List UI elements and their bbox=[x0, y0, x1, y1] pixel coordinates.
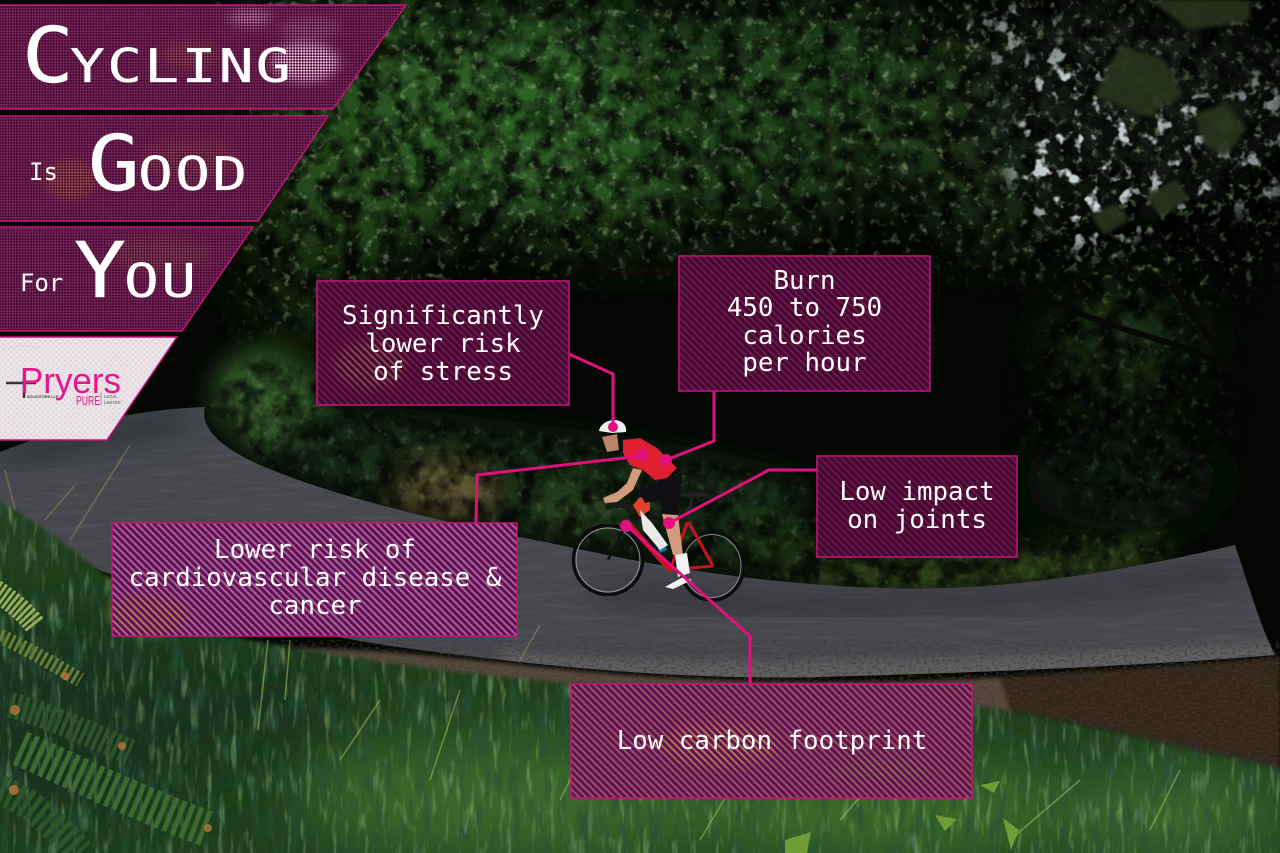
head bbox=[602, 434, 619, 452]
callout: cardiovascular: Lower risk of bbox=[214, 535, 416, 565]
line: joints bbox=[671, 470, 817, 522]
line: stress bbox=[569, 354, 613, 428]
callout: stress: Significantly bbox=[342, 301, 544, 331]
callout: stress bbox=[317, 281, 569, 405]
callout: stress: of stress bbox=[373, 357, 513, 387]
callout: cardiovascular: cardiovascular disease & bbox=[129, 563, 502, 593]
callout: joints: on joints bbox=[847, 505, 987, 535]
cyclist illustration bbox=[574, 420, 744, 600]
hedge bank bbox=[215, 350, 1165, 592]
logo panel: Pryers: LIMITED bbox=[104, 400, 121, 405]
front wheel bbox=[574, 526, 642, 594]
title banner: Cycling: YCLING bbox=[70, 40, 293, 93]
ferns bbox=[0, 590, 210, 853]
jersey bbox=[623, 438, 677, 480]
connector lines bbox=[476, 354, 817, 684]
title banner: For You: OU bbox=[124, 255, 198, 308]
near thigh cuff and far leg bbox=[633, 497, 692, 589]
logo small text: SOLICITORS LLP bbox=[27, 395, 59, 399]
title banner: Is Good: OOD bbox=[138, 148, 249, 201]
callout: joints: Low impact bbox=[839, 477, 995, 507]
logo panel: Pryers: PURE bbox=[76, 393, 100, 408]
line: cardiovascular bbox=[476, 456, 641, 523]
title banner: Is Good: G bbox=[88, 119, 140, 209]
line: carbon bbox=[627, 526, 750, 684]
title banner: For You: For bbox=[20, 269, 63, 297]
logo panel: Pryers: LEGAL bbox=[104, 394, 118, 399]
callout: carbon: Low carbon footprint bbox=[617, 726, 927, 756]
callout: cardiovascular bbox=[110, 523, 517, 636]
callout: joints bbox=[817, 456, 1017, 557]
rear wheel bbox=[680, 532, 744, 600]
grass bbox=[0, 480, 1280, 853]
helmet bbox=[599, 420, 626, 433]
title banner: For You bbox=[0, 226, 253, 331]
title banner: Cycling: C bbox=[22, 11, 74, 101]
callout: calories: calories bbox=[742, 321, 867, 351]
logo panel: Pryers bbox=[0, 337, 177, 440]
logo wordmark: Pryers bbox=[20, 360, 121, 401]
shorts bbox=[638, 473, 682, 515]
callout: calories: 450 to 750 bbox=[727, 293, 882, 323]
verge and dirt bbox=[290, 648, 1280, 772]
callout: carbon bbox=[571, 684, 972, 798]
callout: stress: lower risk bbox=[365, 329, 521, 359]
logo cross bbox=[6, 372, 36, 398]
callout: calories: per hour bbox=[742, 348, 867, 378]
line: calories bbox=[671, 391, 714, 458]
callout: cardiovascular: cancer bbox=[268, 591, 362, 621]
title banner: Is Good: Is bbox=[29, 158, 58, 186]
callout: calories: Burn bbox=[773, 266, 836, 296]
title banner: For You: Y bbox=[74, 226, 126, 316]
callout: calories bbox=[679, 256, 930, 391]
title banner: Cycling bbox=[0, 5, 406, 109]
connector end dots bbox=[608, 422, 675, 532]
bike frame bbox=[606, 495, 713, 570]
title banner: Is Good bbox=[0, 116, 328, 221]
road bbox=[0, 407, 1275, 677]
bottle bbox=[651, 530, 667, 553]
arm bbox=[603, 468, 642, 503]
